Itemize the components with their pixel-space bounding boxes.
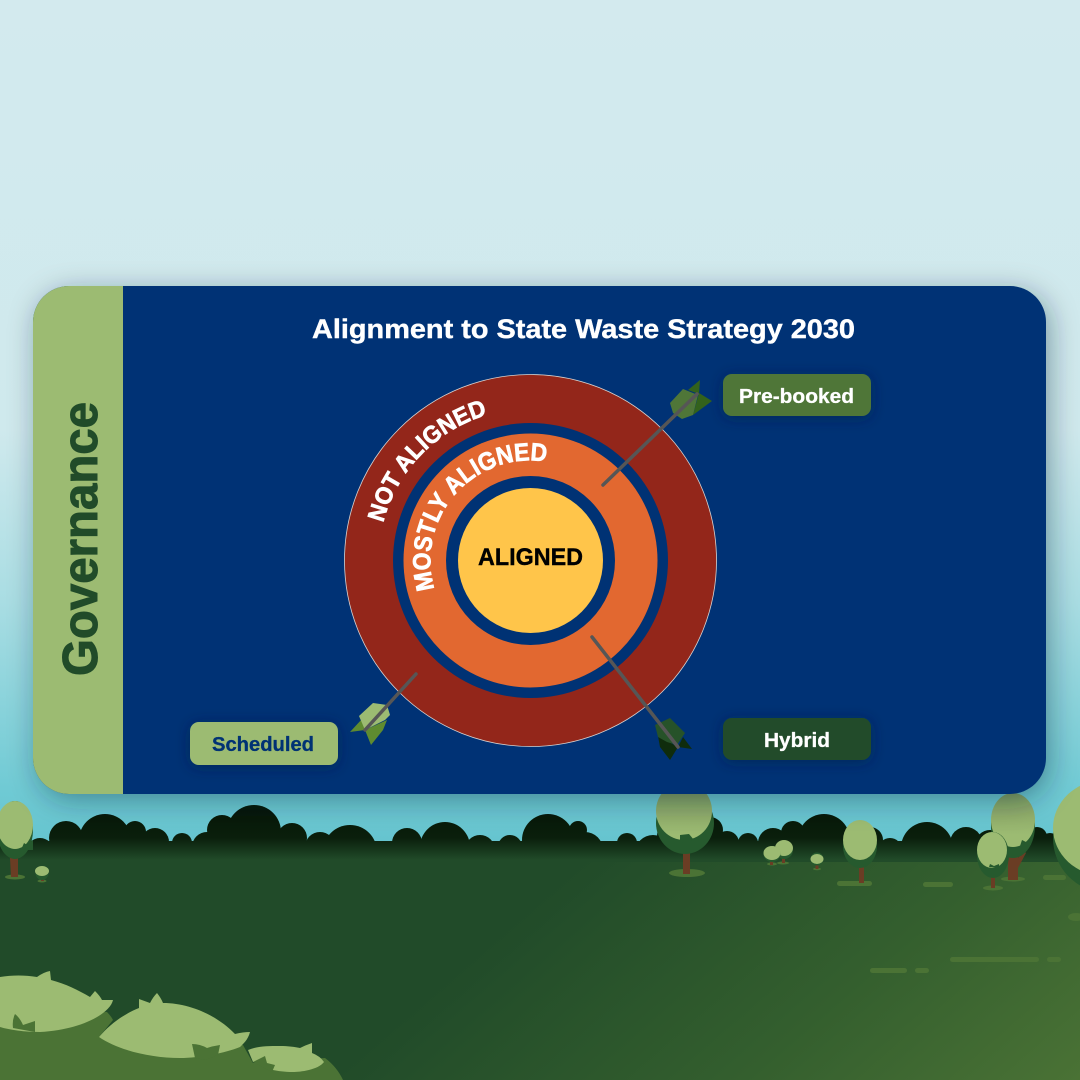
label: aligned: ALIGNED xyxy=(478,544,583,571)
tree: small pair xyxy=(764,840,793,866)
bush: middle xyxy=(99,993,250,1058)
chart title: Alignment to State Waste Strategy 2030 xyxy=(312,314,855,344)
governance side strip xyxy=(33,286,123,794)
tree: centre behind card xyxy=(656,782,714,877)
tree: small centre right xyxy=(810,852,824,870)
label: pre-booked: Pre-booked xyxy=(739,386,854,408)
arrow: scheduled xyxy=(350,674,416,745)
infographic canvas xyxy=(0,272,1080,1080)
bush: right xyxy=(248,1043,324,1072)
arrow: hybrid xyxy=(592,637,692,760)
tree: medium right xyxy=(843,820,877,883)
leaf: right bush xyxy=(253,1056,275,1072)
tree: tall right xyxy=(991,793,1035,882)
bush: left xyxy=(0,971,113,1032)
ring: mostly aligned xyxy=(404,434,658,688)
distant tree line xyxy=(0,805,1080,879)
arrow: pre-booked xyxy=(603,380,712,485)
grass streaks xyxy=(837,875,1080,973)
side label: Governance xyxy=(54,402,108,676)
label: pre-booked xyxy=(723,374,871,416)
label: scheduled: Scheduled xyxy=(212,734,314,756)
leaf: middle bush xyxy=(192,1044,220,1060)
label: not aligned: NOT ALIGNED xyxy=(367,401,485,522)
card background xyxy=(33,286,1046,794)
tree: far left xyxy=(0,801,33,880)
tree: small left xyxy=(35,866,49,882)
label: mostly aligned: MOSTLY ALIGNED xyxy=(412,442,547,592)
ground xyxy=(0,862,1080,1080)
label: scheduled xyxy=(190,722,338,765)
centre: aligned xyxy=(458,488,603,633)
tree: edge right xyxy=(1053,780,1080,892)
ring: not aligned xyxy=(344,374,716,746)
label: hybrid xyxy=(723,718,871,760)
foreground bushes xyxy=(0,971,343,1080)
label: hybrid: Hybrid xyxy=(764,730,830,752)
leaf: left bush xyxy=(13,1014,35,1032)
bush base xyxy=(0,1000,343,1080)
tree: front right xyxy=(977,832,1009,890)
target chart xyxy=(344,374,717,747)
main card xyxy=(19,274,1068,817)
